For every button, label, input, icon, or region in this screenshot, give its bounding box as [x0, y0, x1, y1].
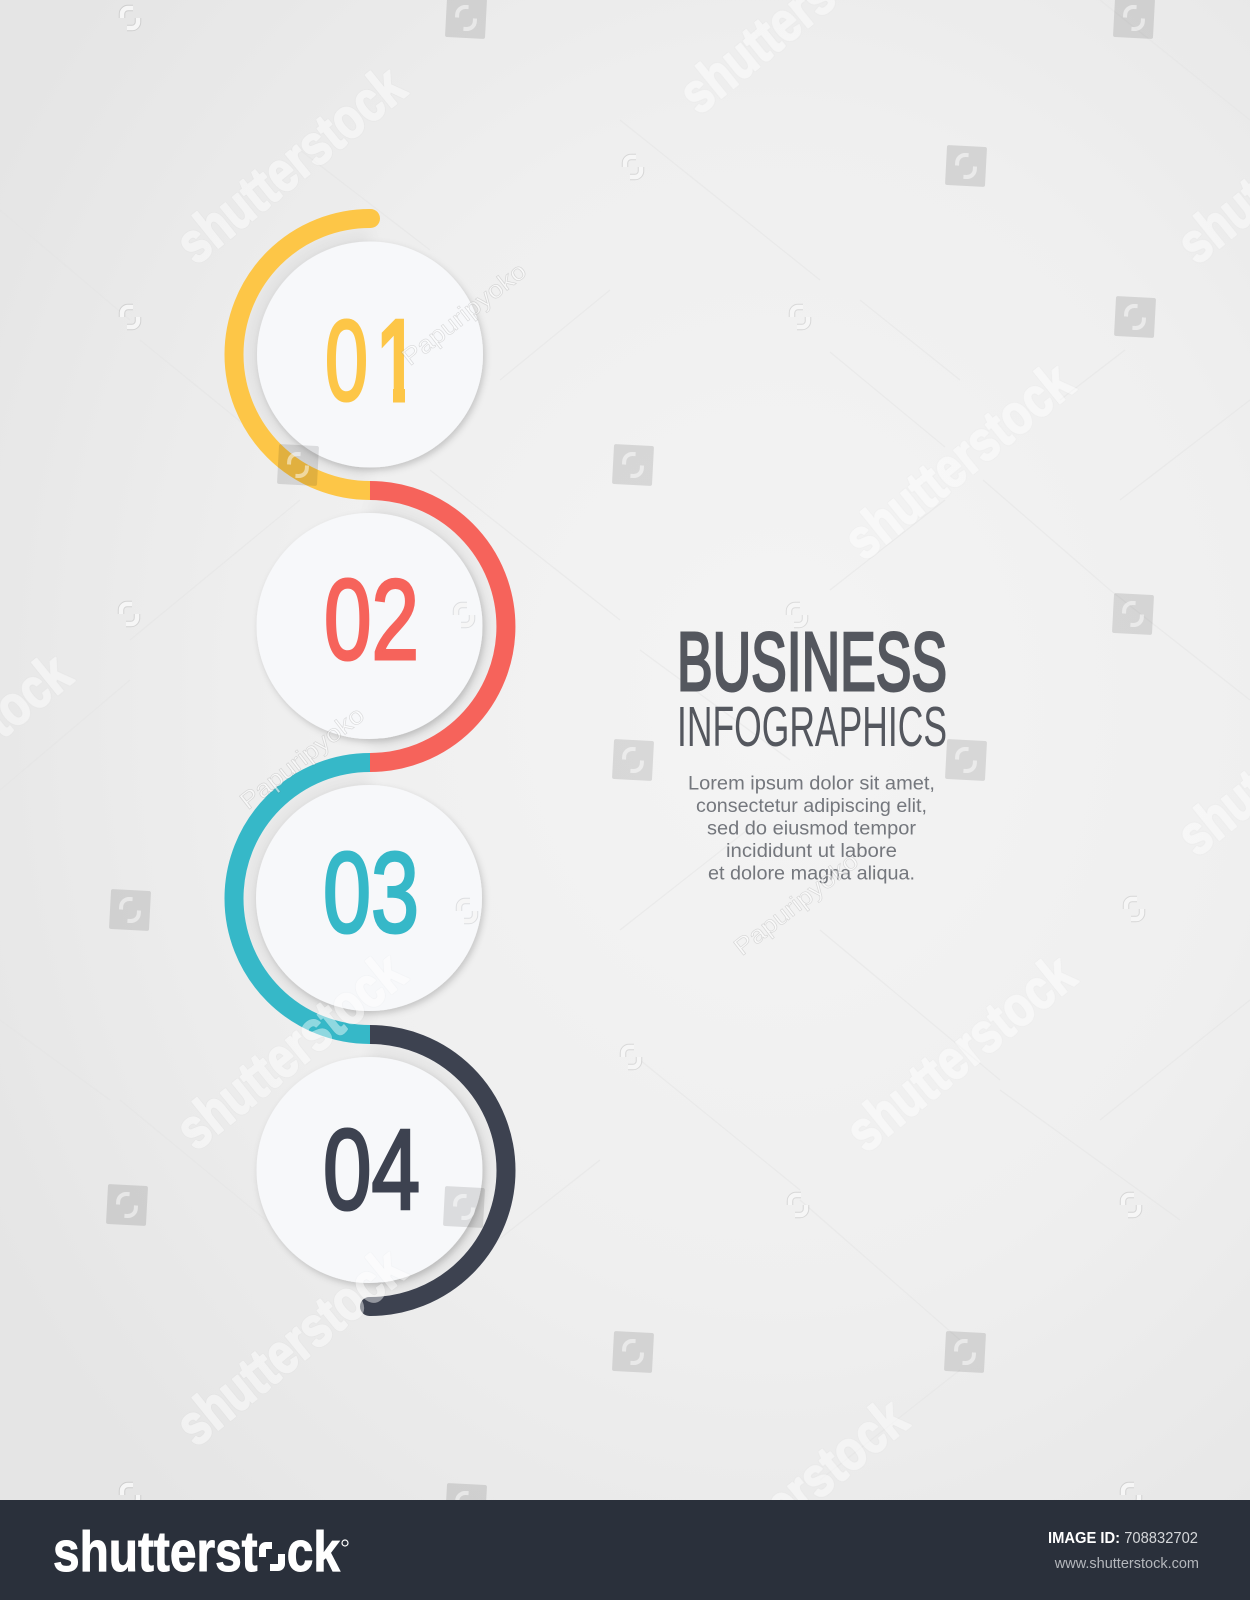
footer logo: shutterstock — [53, 1520, 340, 1584]
body text: et dolore magna aliqua. — [708, 864, 915, 884]
watermark wordmarks: shutterstock — [834, 942, 1087, 1164]
heading: business: BUSINESS — [677, 615, 947, 708]
arc: red — [370, 490, 506, 762]
image id: IMAGE ID: 708832702 — [1048, 1530, 1198, 1547]
step 01 — [257, 242, 483, 468]
arc: dark — [370, 1034, 506, 1306]
watermark wordmarks: shutterstock — [164, 940, 417, 1162]
body text: consectetur adipiscing elit, — [696, 796, 927, 817]
arc: yellow — [234, 218, 370, 490]
heading: infographics: INFOGRAPHICS — [677, 695, 947, 759]
step 04: 04 — [323, 1107, 420, 1234]
arc cap: yellow — [360, 209, 380, 228]
website: www.shutterstock.com — [1054, 1556, 1199, 1572]
body text — [688, 774, 935, 884]
soft crescents behind the circles — [245, 230, 495, 1295]
step 03: 03 — [323, 830, 419, 957]
watermark wordmarks: shutterstock — [164, 54, 417, 276]
body text: incididunt ut labore — [726, 841, 897, 862]
diagram: numbered steps — [234, 218, 506, 1306]
body text: Lorem ipsum dolor sit amet, — [688, 774, 935, 794]
watermark author names: Papuripyoko — [235, 702, 370, 815]
watermark author names — [235, 258, 864, 961]
arc cap: dark — [360, 1297, 380, 1316]
watermark wordmarks: shutterstock — [164, 1236, 417, 1458]
step 04 — [256, 1057, 482, 1283]
body text: sed do eiusmod tempor — [707, 818, 917, 840]
arc: teal — [234, 762, 370, 1034]
watermark wordmarks: shutterstock — [832, 350, 1085, 572]
step 01: 0 — [325, 298, 368, 425]
step 02: 02 — [324, 557, 419, 684]
step 02 — [256, 513, 482, 739]
watermark small swirl logos — [121, 8, 1142, 1505]
watermark author names: Papuripyoko — [397, 258, 532, 371]
title block — [677, 615, 947, 884]
step 01: 1 — [376, 298, 419, 425]
footer bar — [0, 1500, 1250, 1600]
watermark author names: Papuripyoko — [729, 848, 864, 961]
step 03 — [256, 785, 482, 1011]
